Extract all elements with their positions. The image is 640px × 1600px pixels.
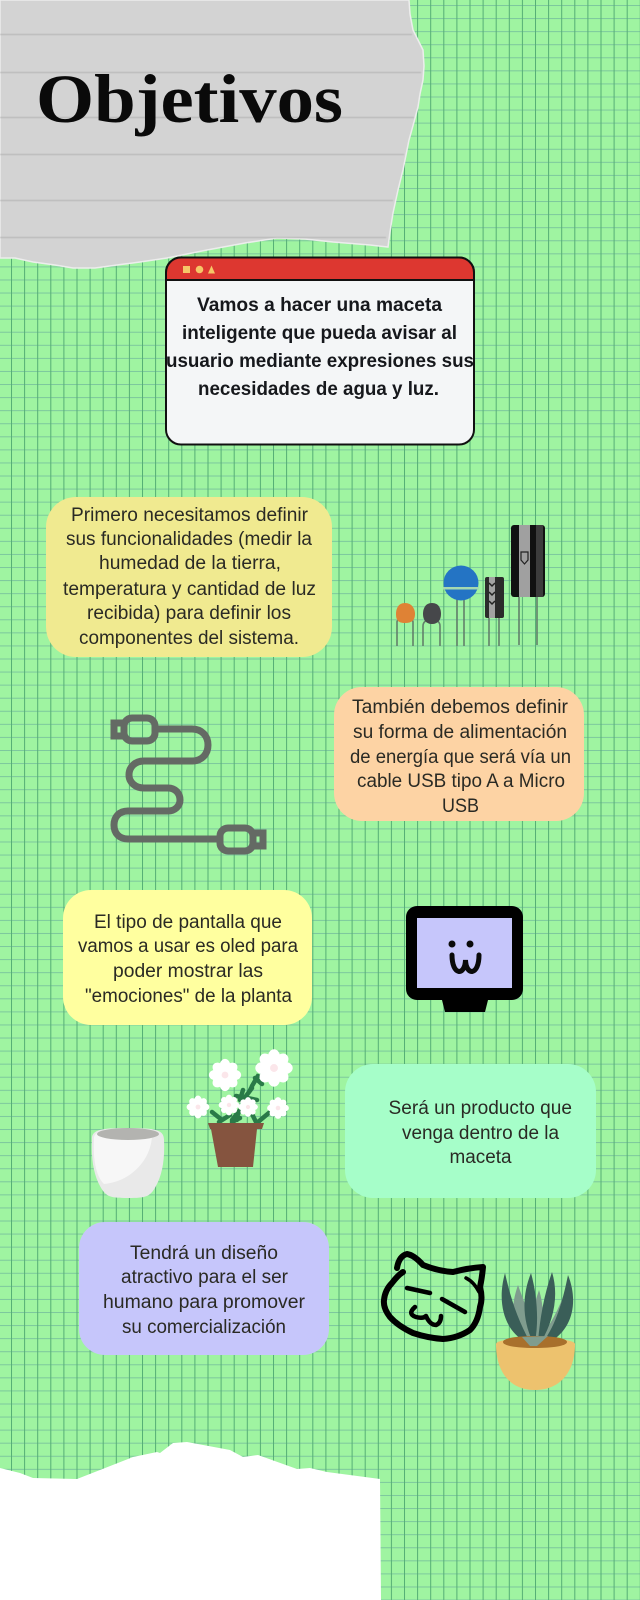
panel box: [63, 890, 312, 1025]
icon: electronic components: [396, 525, 545, 646]
intro text: usuario mediante expresiones sus: [166, 350, 474, 372]
panel text: [78, 912, 298, 1007]
panel text: humedad de la tierra,: [99, 553, 281, 574]
panel box: [345, 1064, 596, 1198]
torn white paper footer: [0, 1442, 381, 1600]
panel text: [63, 505, 316, 649]
icon: cat face: [384, 1254, 483, 1339]
panel text: [103, 1243, 306, 1338]
panel text: poder mostrar las: [113, 961, 263, 982]
panel text: maceta: [450, 1147, 512, 1168]
panel text: su comercialización: [122, 1317, 286, 1338]
panel: power supply: [334, 687, 584, 821]
window control icons: [183, 266, 215, 274]
panel: screen type: [63, 890, 312, 1025]
torn notebook paper header: [0, 0, 424, 268]
panel text: temperatura y cantidad de luz: [63, 579, 316, 600]
panel text: Primero necesitamos definir: [71, 505, 309, 526]
intro text: Vamos a hacer una maceta: [197, 294, 442, 316]
panel box: [46, 497, 332, 657]
panel text: [388, 1098, 572, 1168]
panel text: El tipo de pantalla que: [94, 912, 282, 933]
intro text: necesidades de agua y luz.: [198, 378, 439, 400]
window title bar: [166, 258, 474, 280]
intro text: inteligente que pueda avisar al: [182, 322, 457, 344]
window body: [166, 258, 474, 444]
panel: intro window: [166, 258, 474, 444]
panel text: humano para promover: [103, 1292, 306, 1313]
panel box: [79, 1222, 329, 1355]
panel text: Tendrá un diseño: [130, 1243, 278, 1264]
panel text: recibida) para definir los: [87, 603, 291, 624]
panel text: sus funcionalidades (medir la: [66, 529, 312, 550]
panel text: USB: [442, 796, 479, 817]
panel: design: [79, 1222, 329, 1355]
panel text: componentes del sistema.: [79, 628, 299, 649]
panel text: También debemos definir: [352, 697, 569, 718]
panel box: [334, 687, 584, 821]
icon: USB cable: [114, 718, 263, 851]
panel text: atractivo para el ser: [121, 1267, 289, 1288]
panel text: su forma de alimentación: [353, 722, 567, 743]
panel text: "emociones" de la planta: [85, 986, 292, 1007]
panel text: vamos a usar es oled para: [78, 936, 298, 957]
icon: succulent in yellow pot: [496, 1272, 575, 1390]
panel text: Será un producto que: [388, 1098, 572, 1119]
panel text: de energía que será vía un: [350, 747, 571, 768]
panel text: [350, 697, 571, 817]
panel text: venga dentro de la: [402, 1123, 559, 1144]
title: Objetivos: [36, 61, 343, 137]
icon: flower pot: [187, 1049, 293, 1167]
icon: OLED screen with face: [406, 906, 523, 1012]
icon: white pot: [92, 1128, 164, 1198]
panel: product: [345, 1064, 596, 1198]
panel text: cable USB tipo A a Micro: [357, 771, 565, 792]
intro text: [166, 294, 474, 400]
panel: functionalities: [46, 497, 332, 657]
